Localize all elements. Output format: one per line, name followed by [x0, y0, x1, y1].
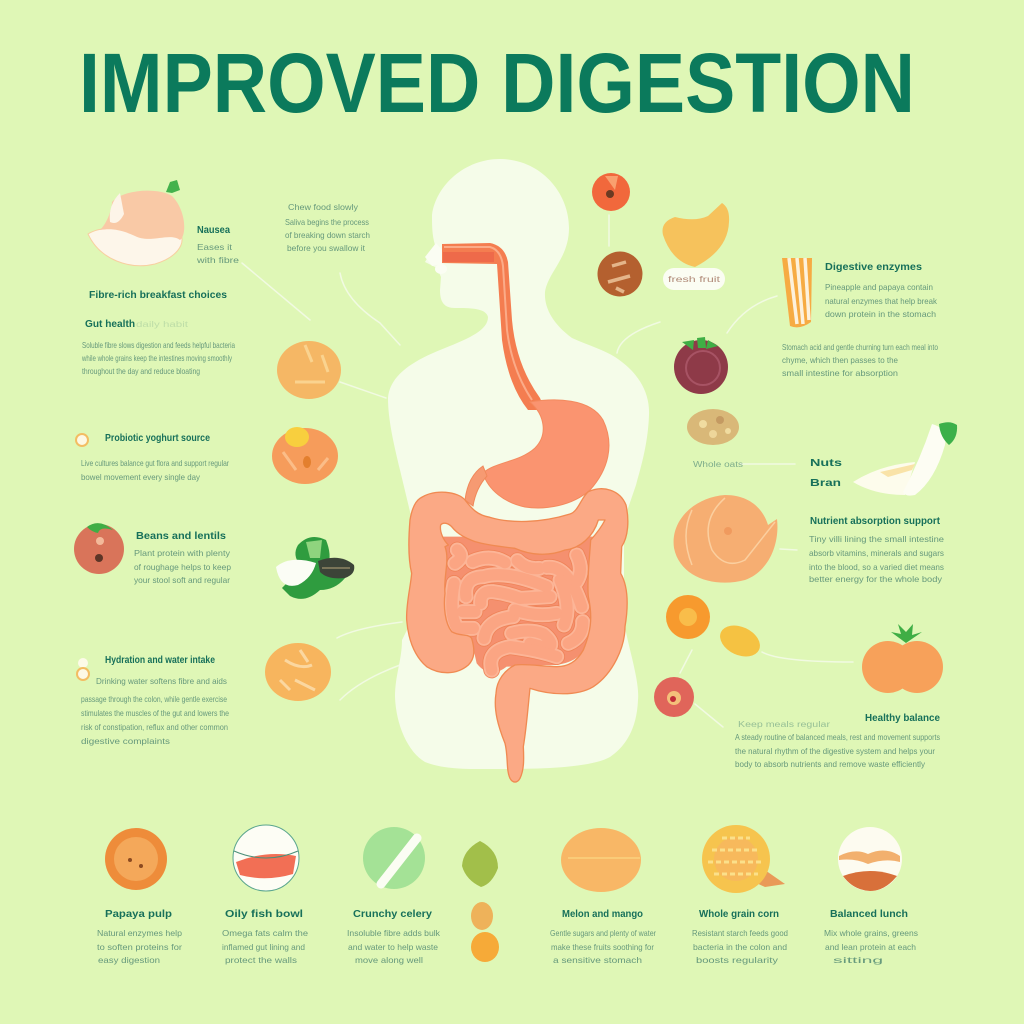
title: IMPROVED DIGESTION	[79, 36, 915, 130]
connector lines	[242, 215, 853, 727]
small intestine backing	[443, 537, 593, 673]
text: short label: Bran	[810, 477, 841, 489]
bullets and text: left block four	[77, 654, 229, 746]
intestines	[407, 489, 628, 782]
bottom item: celery: and water to help waste	[348, 942, 438, 952]
food: orange with yolk	[272, 427, 338, 484]
text: left block three: of roughage helps to keep	[134, 562, 231, 572]
text: right block four: Keep meals regular	[738, 720, 830, 729]
bullet and text: left block two: bowel movement every single day	[81, 472, 201, 482]
text: top centre note: Chew food slowly	[288, 202, 359, 212]
text: upper left note: with fibre	[196, 255, 239, 265]
bullet and text: left block two: Probiotic yoghurt source	[105, 432, 210, 444]
bottom item: salmon bowl: Oily fish bowl	[225, 908, 303, 920]
bottom item: celery: Insoluble fibre adds bulk	[347, 928, 441, 938]
text: right block one: Digestive enzymes	[825, 261, 922, 273]
text: right block four: Healthy balance	[865, 712, 940, 724]
bottom item: cantaloupe: Gentle sugars and plenty of water	[550, 928, 656, 938]
text: left block three	[134, 530, 231, 585]
food: green leaves with seed	[276, 537, 354, 599]
text: left block three: your stool soft and regular	[134, 575, 230, 585]
text: right block four	[735, 712, 940, 769]
icon: green leaf	[462, 841, 498, 887]
food: white cabbage with leaf	[853, 422, 957, 496]
text: upper left block: throughout the day and reduce bloating	[82, 366, 200, 376]
bullet and text: left block two	[76, 432, 229, 482]
text: right block three: into the blood, so a varied diet means	[809, 562, 944, 572]
food: citrus slice	[265, 643, 331, 701]
text: upper left block: Gut health	[85, 318, 135, 330]
text: upper left block: while whole grains keep the intestines moving smoothly	[81, 353, 233, 363]
text: right block two: chyme, which then passes to the	[782, 355, 898, 365]
bottom item: papaya: Natural enzymes help	[97, 928, 182, 938]
bottom item: salmon bowl	[222, 825, 308, 965]
text: left block three: Beans and lentils	[136, 530, 226, 542]
bullets and text: left block four: risk of constipation, reflux and other common	[81, 722, 228, 732]
bottom item: sweetcorn: Resistant starch feeds good	[692, 928, 788, 938]
bottom item: salmon bowl: Omega fats calm the	[222, 928, 308, 938]
text: right block four: body to absorb nutrients and remove waste efficiently	[735, 759, 926, 769]
food: yellow squash	[662, 203, 729, 267]
label pill: fresh fruit	[668, 275, 721, 284]
text: right block two: small intestine for absorption	[782, 368, 898, 378]
bottom item: sweetcorn: bacteria in the colon and	[693, 942, 787, 952]
text: top centre note: Saliva begins the process	[285, 217, 369, 227]
text: upper left note: Eases it	[197, 242, 233, 252]
bullets and text: left block four: stimulates the muscles of the gut and lowers the	[81, 708, 229, 718]
text: upper left note	[196, 224, 239, 265]
human body silhouette	[388, 159, 649, 769]
bottom item: papaya: to soften proteins for	[97, 942, 182, 952]
food: brown fig	[598, 252, 642, 296]
bullets and text: left block four: Drinking water softens fibre and aids	[96, 676, 227, 686]
digestive tract	[407, 243, 628, 782]
food: orange fruit	[666, 595, 710, 639]
large intestine	[407, 489, 628, 782]
bottom item: sweetcorn	[692, 825, 788, 965]
food: red flower fruit	[592, 173, 630, 211]
text: right block one: down protein in the stomach	[825, 309, 936, 319]
food: large peach half	[674, 495, 777, 583]
bottom item: sandwich: sitting	[833, 955, 884, 965]
food: orange round	[277, 341, 341, 399]
bottom item: celery: move along well	[355, 955, 423, 965]
text: upper left block: Soluble fibre slows digestion and feeds helpful bacteria	[82, 340, 235, 350]
text: top centre note: before you swallow it	[287, 243, 366, 253]
bottom item: cantaloupe: make these fruits soothing for	[551, 942, 654, 952]
text: right block three: absorb vitamins, minerals and sugars	[809, 548, 944, 558]
food: twin orange with leaves	[862, 624, 943, 693]
bottom item: celery: Crunchy celery	[353, 908, 432, 920]
food: yellow seed pod	[715, 619, 765, 663]
bottom item: salmon bowl: protect the walls	[225, 955, 297, 965]
bullets and text: left block four: digestive complaints	[81, 736, 170, 746]
food: oat cookie	[687, 409, 739, 445]
food: plum	[674, 337, 728, 394]
text: right block three	[809, 515, 944, 584]
bottom item: sweetcorn: Whole grain corn	[699, 908, 779, 920]
text: right block one: natural enzymes that help break	[825, 296, 938, 306]
bottom item: sweetcorn: boosts regularity	[696, 955, 779, 965]
text: right block two	[782, 342, 938, 378]
text: upper left block: Fibre-rich breakfast choices	[89, 289, 227, 301]
text: right block three: Tiny villi lining the small intestine	[809, 534, 944, 544]
bottom item: cantaloupe	[550, 828, 656, 965]
stomach	[483, 400, 609, 508]
nose and mouth detail	[425, 243, 447, 274]
icon: small orange fruits	[471, 902, 499, 962]
text: top centre note	[285, 202, 370, 253]
food: tomato	[74, 523, 124, 574]
text: right block one	[825, 261, 938, 319]
bottom item: papaya	[97, 828, 182, 965]
bottom item: cantaloupe: Melon and mango	[562, 908, 643, 920]
bottom item: sandwich	[824, 827, 918, 965]
bottom item: salmon bowl: inflamed gut lining and	[222, 942, 305, 952]
text: short label: Nuts	[810, 457, 842, 469]
bottom item: sandwich: Balanced lunch	[830, 908, 908, 920]
bottom item: cantaloupe: a sensitive stomach	[553, 955, 642, 965]
bullet and text: left block two: Live cultures balance gut flora and support regular	[81, 458, 229, 468]
food: corn strip	[782, 258, 812, 327]
bottom item: papaya: Papaya pulp	[105, 908, 172, 920]
esophagus	[442, 243, 545, 410]
text: top centre note: of breaking down starch	[285, 230, 370, 240]
text: right block four: A steady routine of balanced meals, rest and movement supports	[735, 732, 940, 742]
text: left block three: Plant protein with plenty	[134, 548, 231, 558]
text: right block two: Stomach acid and gentle churning turn each meal into	[782, 342, 938, 352]
bottom item: celery	[347, 827, 441, 965]
text: right block three: Nutrient absorption support	[810, 515, 940, 527]
text: upper left note: Nausea	[197, 224, 230, 236]
duodenum	[465, 466, 487, 506]
text: upper left block: daily habit	[136, 320, 189, 329]
small intestine loops	[452, 550, 583, 670]
bottom item: papaya: easy digestion	[98, 955, 160, 965]
green leaf	[166, 180, 180, 193]
text: right block four: the natural rhythm of the digestive system and helps your	[735, 746, 935, 756]
text: right block one: Pineapple and papaya contain	[825, 282, 933, 292]
text: upper left block	[81, 289, 235, 376]
bullets and text: left block four: Hydration and water intake	[105, 654, 215, 666]
label pill	[663, 268, 725, 290]
bottom item: sandwich: and lean protein at each	[825, 942, 916, 952]
bullets and text: left block four: passage through the colon, while gentle exercise	[81, 694, 227, 704]
bottom item: sandwich: Mix whole grains, greens	[824, 928, 918, 938]
text: short label	[810, 457, 842, 489]
text: right block three: better energy for the whole body	[809, 574, 943, 584]
text: small caption: Whole oats	[693, 460, 743, 469]
food: peach top left	[88, 180, 184, 266]
food: red berry	[654, 677, 694, 717]
